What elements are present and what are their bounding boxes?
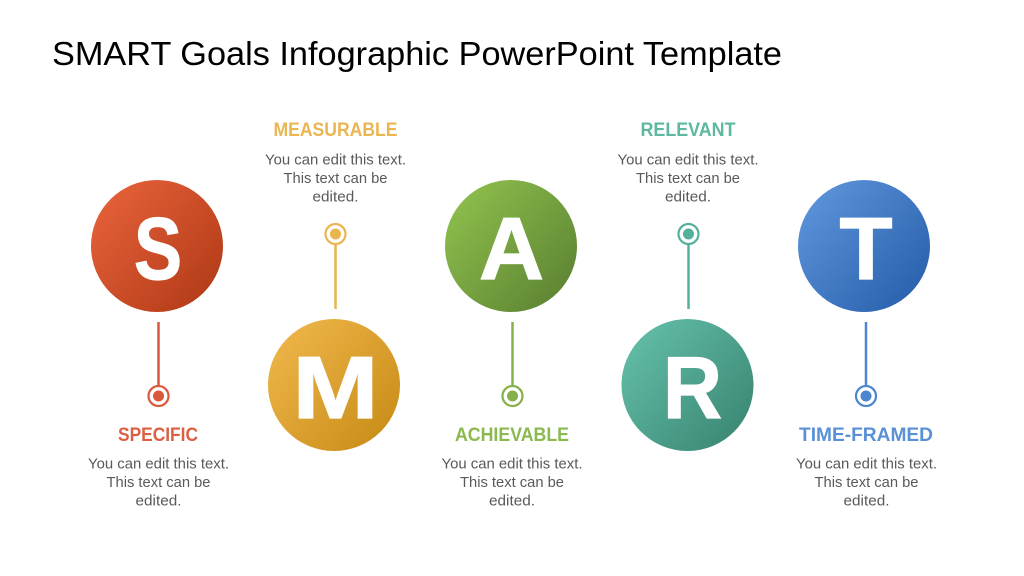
title: SMART Goals Infographic PowerPoint Template bbox=[52, 36, 782, 73]
icon: letter A circle: A bbox=[479, 199, 544, 298]
heading: time-framed: TIME-FRAMED bbox=[799, 425, 933, 446]
text block: time-framed bbox=[796, 456, 937, 510]
connector: relevant bbox=[678, 224, 698, 309]
text block: relevant: edited. bbox=[665, 190, 711, 206]
panel: measurable bbox=[265, 120, 406, 451]
text block: relevant bbox=[618, 152, 758, 206]
heading: specific: SPECIFIC bbox=[118, 425, 198, 446]
icon: letter T circle: T bbox=[840, 199, 892, 298]
icon: letter S circle: S bbox=[134, 199, 182, 298]
text block: time-framed: edited. bbox=[844, 494, 890, 510]
text block: achievable: edited. bbox=[489, 494, 535, 510]
panel: achievable bbox=[442, 180, 582, 510]
icon: letter M circle bbox=[268, 319, 400, 451]
panel: relevant bbox=[618, 120, 758, 451]
text block: specific: You can edit this text. bbox=[88, 456, 229, 472]
text block: relevant: You can edit this text. bbox=[618, 152, 758, 168]
icon: letter R circle bbox=[622, 319, 754, 451]
text block: relevant: This text can be bbox=[636, 171, 740, 187]
text block: achievable: This text can be bbox=[460, 475, 564, 491]
heading: relevant: RELEVANT bbox=[640, 120, 736, 141]
text block: measurable: This text can be bbox=[284, 171, 388, 187]
icon: letter M circle: M bbox=[292, 338, 378, 437]
connector: achievable bbox=[502, 322, 522, 406]
icon: letter R circle: R bbox=[663, 338, 722, 437]
text block: specific: edited. bbox=[136, 494, 182, 510]
text block: time-framed: This text can be bbox=[814, 475, 918, 491]
text block: measurable: edited. bbox=[312, 190, 358, 206]
text block: time-framed: You can edit this text. bbox=[796, 456, 937, 472]
connector: specific bbox=[148, 322, 168, 406]
icon: letter S circle bbox=[91, 180, 223, 312]
text block: measurable bbox=[265, 152, 406, 206]
text block: specific bbox=[88, 456, 229, 510]
panel: time-framed bbox=[796, 180, 937, 510]
text block: achievable bbox=[442, 456, 582, 510]
icon: letter A circle bbox=[445, 180, 577, 312]
text block: achievable: You can edit this text. bbox=[442, 456, 582, 472]
connector: measurable bbox=[326, 224, 346, 309]
text block: specific: This text can be bbox=[106, 475, 210, 491]
panel: specific bbox=[88, 180, 229, 510]
heading: achievable: ACHIEVABLE bbox=[455, 425, 569, 446]
icon: letter T circle bbox=[798, 180, 930, 312]
text block: measurable: You can edit this text. bbox=[265, 152, 406, 168]
heading: measurable: MEASURABLE bbox=[274, 120, 398, 141]
connector: time-framed bbox=[856, 322, 876, 406]
